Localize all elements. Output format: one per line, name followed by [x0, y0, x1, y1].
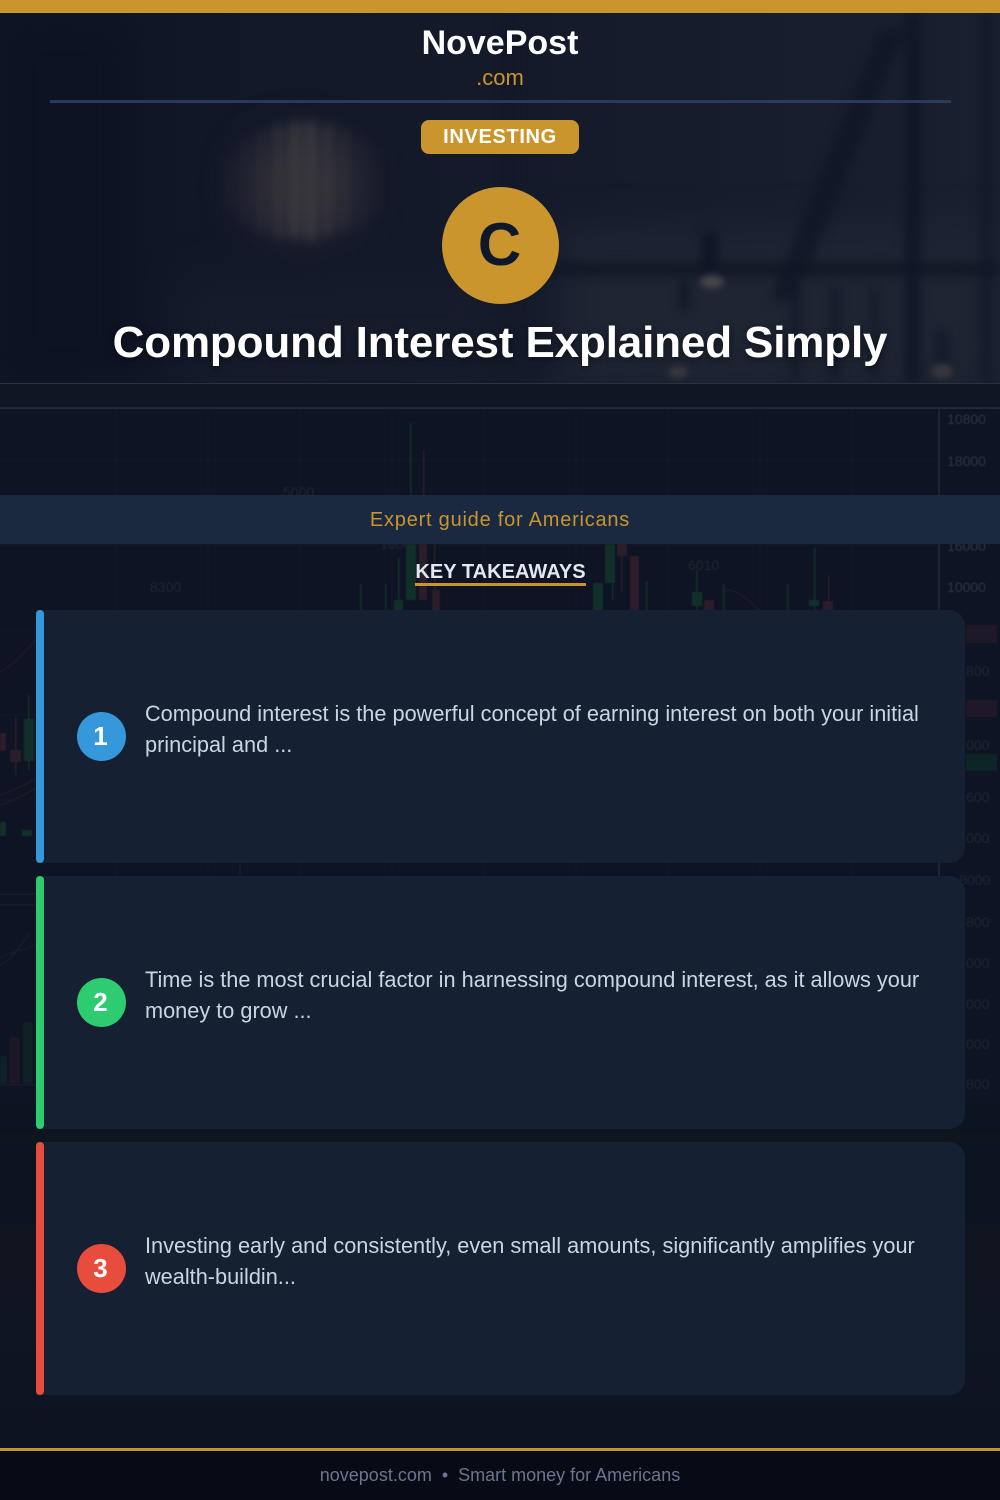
takeaway text 2: money to grow ... [145, 998, 312, 1023]
number badge 2 [77, 978, 126, 1027]
number badge 3 [77, 1244, 126, 1293]
takeaway text 1: principal and ... [145, 732, 292, 757]
ceiling light glow with vertical stripes [225, 122, 379, 240]
category badge [421, 120, 579, 154]
chart axis labels: 000 [966, 830, 990, 846]
takeaway text 1 [145, 701, 919, 757]
accent bar: blue [36, 610, 44, 863]
chart axis labels: 000 [966, 1036, 990, 1052]
category badge: INVESTING [443, 126, 557, 148]
takeaway text 3 [145, 1233, 915, 1289]
number badge 3: 3 [93, 1253, 108, 1283]
panel: takeaway 3 [36, 1142, 965, 1395]
number badge 1 [77, 712, 126, 761]
chart axis labels: 6010 [688, 557, 719, 573]
office photo [0, 13, 1000, 384]
chart axis labels: 1000 [380, 536, 411, 552]
takeaway text 2 [145, 967, 919, 1023]
chart axis labels: 800 [966, 663, 990, 679]
chart axis labels: 000 [966, 955, 990, 971]
chart axis labels: 5000 [283, 484, 314, 500]
chart axis labels: 10800 [947, 411, 986, 427]
chart axis labels: 800 [966, 1076, 990, 1092]
chart axis labels: 8000 [959, 872, 990, 888]
takeaway text 3: Investing early and consistently, even small amounts, significantly amplifies your [145, 1233, 915, 1258]
chart axis labels: 800 [966, 914, 990, 930]
panel: takeaway 1 [36, 610, 965, 863]
icon: letter circle [442, 187, 559, 304]
footer: novepost.com • Smart money for Americans [320, 1465, 680, 1485]
chart axis labels: 600 [966, 789, 990, 805]
chart axis labels: 10000 [947, 579, 986, 595]
section heading: key takeaways: KEY TAKEAWAYS [415, 561, 586, 583]
title: Compound Interest Explained Simply [113, 318, 887, 367]
brand name: NovePost [422, 24, 578, 62]
subtitle strip [0, 495, 1000, 544]
brand suffix: .com [476, 65, 524, 90]
header divider [50, 100, 951, 103]
top accent bar [0, 0, 1000, 13]
chart axis labels: 16000 [947, 538, 986, 554]
accent bar: green [36, 876, 44, 1129]
takeaway text 1: Compound interest is the powerful concept of earning interest on both your initial [145, 701, 919, 726]
chart axis labels: 000 [966, 996, 990, 1012]
chart axis labels: 8300 [150, 579, 181, 595]
number badge 2: 2 [93, 987, 108, 1017]
icon: letter circle: C [478, 211, 521, 278]
takeaway text 3: wealth-buildin... [145, 1264, 296, 1289]
number badge 1: 1 [93, 721, 108, 751]
subtitle strip: Expert guide for Americans [370, 509, 630, 531]
chart axis labels [150, 411, 990, 1092]
trading chart [0, 409, 1000, 1133]
footer [0, 1448, 1000, 1500]
panel: takeaway 2 [36, 876, 965, 1129]
chart axis labels: 18000 [947, 453, 986, 469]
takeaway text 2: Time is the most crucial factor in harnessing compound interest, as it allows your [145, 967, 919, 992]
accent bar: red [36, 1142, 44, 1395]
chart axis labels: 000 [966, 737, 990, 753]
